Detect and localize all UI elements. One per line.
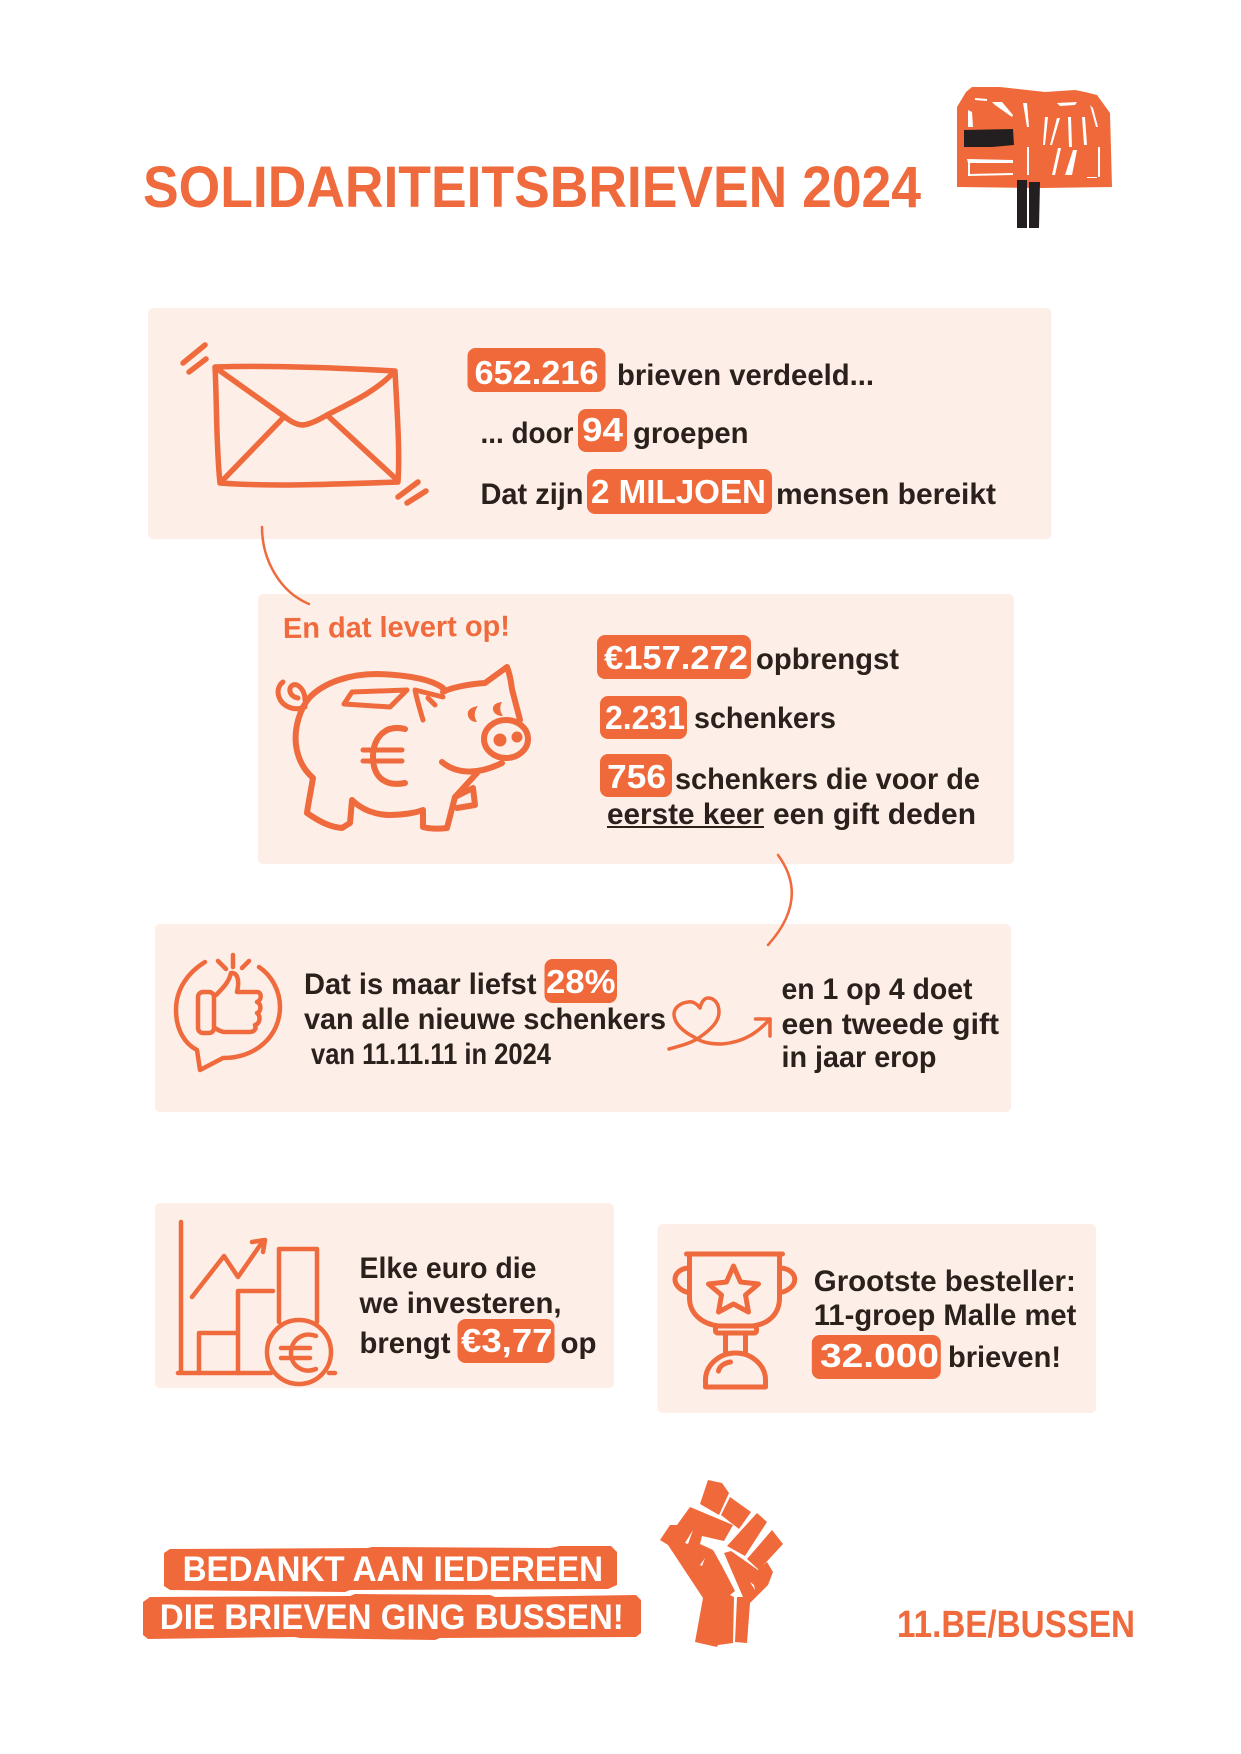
arrow: connector to nieuwe schenkers [768, 855, 792, 945]
stat: 756: 756 [607, 758, 666, 795]
panel: brieven verdeeld [148, 308, 1052, 539]
banner: bedankt aan iedereen: BEDANKT AAN IEDEREEN [183, 1550, 603, 1589]
text: grootste besteller: 11-groep Malle met [814, 1299, 1076, 1332]
text: dat zijn: Dat zijn [480, 478, 584, 511]
text: nieuwe schenkers [304, 1003, 666, 1071]
text: elke euro: we investeren, [359, 1287, 562, 1320]
text: opbrengst: opbrengst [756, 643, 899, 676]
text: tweede gift: in jaar erop [782, 1041, 936, 1074]
text: mensen bereikt: mensen bereikt [776, 478, 996, 511]
arrow: connector to opbrengst [262, 527, 309, 604]
text: brieven verdeeld: brieven verdeeld... [617, 359, 874, 392]
stat: 32.000 [812, 1335, 941, 1379]
text: brieven: brieven! [948, 1341, 1061, 1374]
text: op: op [560, 1327, 596, 1360]
stat: 94: 94 [582, 411, 624, 448]
stat: 652.216: 652.216 [474, 354, 598, 391]
panel: rendement [155, 1203, 614, 1388]
stat: 28%: 28% [546, 963, 616, 1000]
text: elke euro: Elke euro die [360, 1252, 536, 1285]
stat: 157.272 euro: €157.272 [604, 639, 748, 676]
text: grootste besteller [814, 1265, 1076, 1332]
text: nieuwe schenkers: van 11.11.11 in 2024 [311, 1038, 551, 1071]
text: schenkers: schenkers [694, 702, 836, 735]
panel: grootste besteller [658, 1224, 1096, 1413]
text: tweede gift: en 1 op 4 doet [782, 973, 973, 1006]
text: door: ... door [480, 417, 574, 450]
text: groepen: groepen [633, 417, 748, 450]
icon: thumbs up bubble [176, 955, 280, 1070]
icon: piggy bank [278, 667, 528, 829]
text: 28 procent: Dat is maar liefst [304, 968, 537, 1001]
stat: 756 [600, 754, 672, 797]
stat: 3,77 euro: €3,77 [461, 1322, 552, 1359]
stat: 2 miljoen: 2 MILJOEN [591, 473, 766, 510]
icon: mailbox [957, 87, 1112, 228]
text: eerste keer: eerste keer [607, 798, 764, 831]
banner: die brieven ging bussen: DIE BRIEVEN GING BUSSEN! [160, 1598, 624, 1637]
text: elke euro: brengt [360, 1327, 451, 1360]
panel: opbrengst [258, 594, 1014, 864]
text: tweede gift: een tweede gift [782, 1008, 999, 1041]
icon: raised fist [660, 1480, 783, 1647]
text: elke euro [359, 1252, 562, 1360]
stat: 2.231: 2.231 [605, 699, 685, 736]
arrow: heart [669, 998, 770, 1049]
icon: trophy [675, 1254, 795, 1387]
title: SOLIDARITEITSBRIEVEN 2024 [143, 155, 921, 220]
text: eerste keer: een gift deden [773, 798, 976, 831]
stat: 32.000: 32.000 [820, 1337, 939, 1374]
text: eerste keer: schenkers die voor de [675, 763, 980, 796]
text: nieuwe schenkers: van alle nieuwe schenkers [304, 1003, 666, 1036]
text: website: 11.BE/BUSSEN [897, 1604, 1135, 1646]
icon: envelope [183, 345, 426, 503]
text: grootste besteller: Grootste besteller: [814, 1265, 1076, 1298]
stat: 94 [578, 409, 627, 452]
panel: nieuwe schenkers [155, 924, 1011, 1112]
icon: growth chart with euro coin [178, 1222, 335, 1384]
text: eerste keer [607, 763, 980, 831]
text: tweede gift [782, 973, 999, 1074]
text: en dat levert op: En dat levert op! [283, 611, 510, 645]
